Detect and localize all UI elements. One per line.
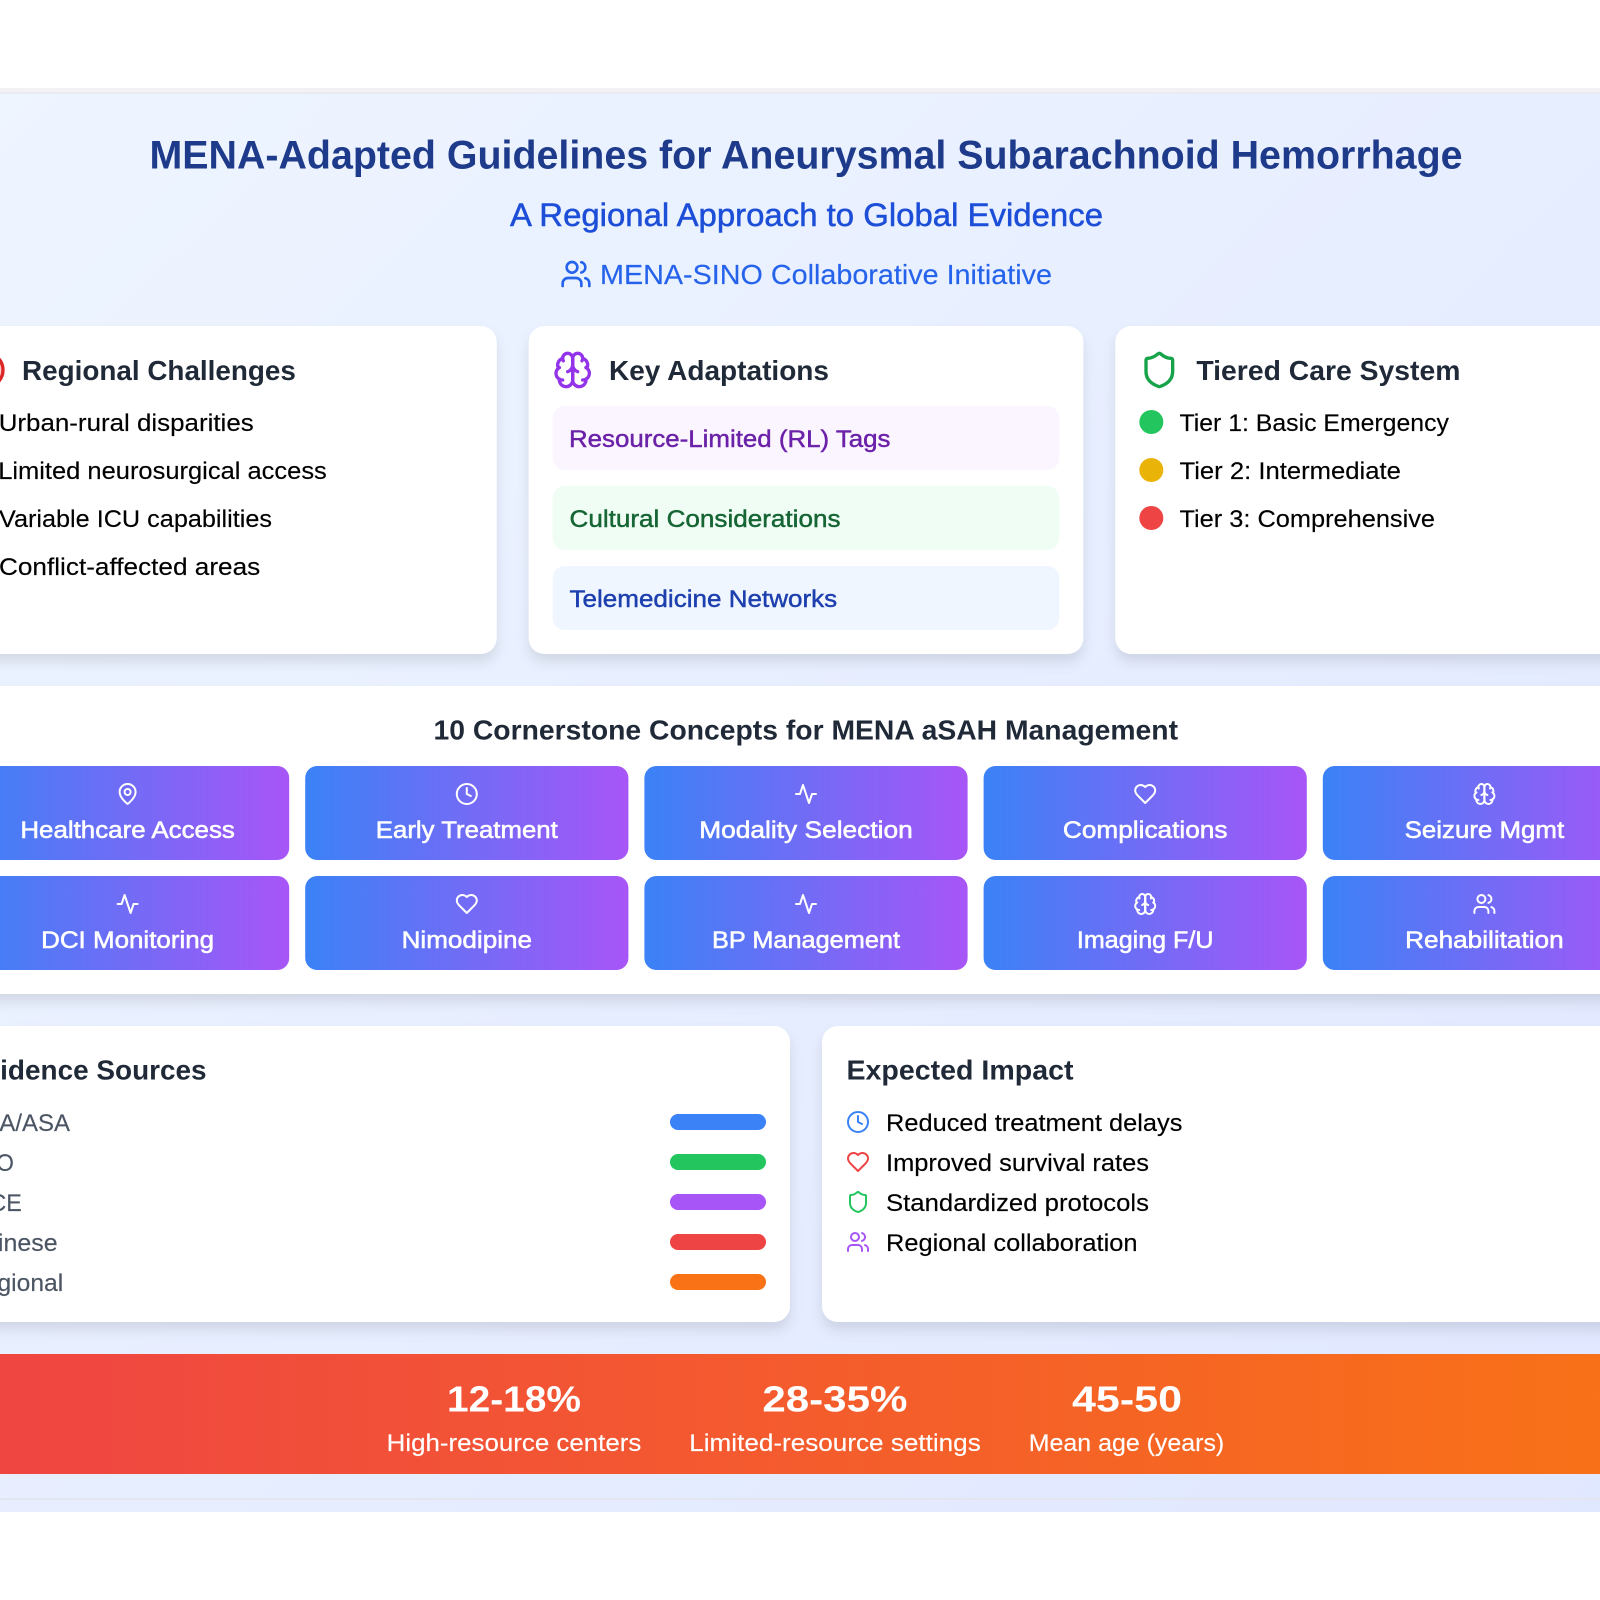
heading: Key Adaptations bbox=[609, 355, 829, 386]
source: ESO bbox=[0, 1150, 766, 1177]
tile: nimodipine bbox=[305, 876, 628, 970]
tile: seizure management bbox=[1323, 766, 1600, 860]
panel: evidence sources bbox=[0, 1026, 790, 1322]
tile: modality selection bbox=[644, 766, 968, 860]
tile: early treatment bbox=[305, 766, 628, 860]
panel: expected impact bbox=[822, 1026, 1600, 1322]
tile: complications: Complications bbox=[1063, 817, 1227, 844]
tile: early treatment: Early Treatment bbox=[376, 817, 558, 844]
adaptation: telemedicine: Telemedicine Networks bbox=[570, 586, 837, 613]
challenge list: Urban-rural disparities bbox=[0, 410, 254, 437]
heading: 10 Cornerstone Concepts for MENA aSAH Management bbox=[434, 715, 1178, 746]
tier 1: Tier 1: Basic Emergency bbox=[1180, 410, 1449, 437]
impact: collaboration: Regional collaboration bbox=[886, 1230, 1138, 1257]
tile: nimodipine: Nimodipine bbox=[402, 927, 532, 954]
heading: Expected Impact bbox=[846, 1054, 1074, 1085]
stat: mean age: Mean age (years) bbox=[1029, 1430, 1224, 1457]
tier 2: Tier 2: Intermediate bbox=[1180, 458, 1401, 485]
stat: high-resource centers bbox=[387, 1378, 641, 1457]
adaptation: RL tags: Resource-Limited (RL) Tags bbox=[569, 426, 890, 453]
tile: imaging follow-up bbox=[984, 876, 1307, 970]
tile: imaging follow-up: Imaging F/U bbox=[1077, 927, 1213, 954]
panel: key adaptations bbox=[529, 326, 1083, 654]
challenge list: Limited neurosurgical access bbox=[0, 458, 327, 485]
statistics band bbox=[0, 1354, 1600, 1474]
source: AHA/ASA bbox=[0, 1110, 766, 1137]
icon: shield bbox=[1146, 353, 1173, 387]
challenge list bbox=[0, 410, 327, 581]
stat: high-resource centers: 12-18% bbox=[447, 1378, 581, 1420]
stat: mean age bbox=[1029, 1378, 1224, 1457]
tier 3: Tier 3: Comprehensive bbox=[1180, 506, 1435, 533]
icon: alert circle bbox=[0, 353, 3, 387]
stat: high-resource centers: High-resource centers bbox=[387, 1430, 641, 1457]
tile: DCI monitoring bbox=[0, 876, 289, 970]
tile: healthcare access: Healthcare Access bbox=[20, 817, 235, 844]
tile: rehabilitation: Rehabilitation bbox=[1405, 927, 1564, 954]
tile: healthcare access bbox=[0, 766, 289, 860]
tile: modality selection: Modality Selection bbox=[699, 817, 913, 844]
heading: Regional Challenges bbox=[22, 355, 296, 386]
stat: mean age: 45-50 bbox=[1072, 1378, 1182, 1420]
adaptation: telemedicine bbox=[553, 566, 1059, 630]
adaptation: RL tags bbox=[553, 406, 1059, 470]
tile: complications bbox=[984, 766, 1307, 860]
stat: limited-resource settings: Limited-resource settings bbox=[689, 1430, 981, 1457]
panel: tiered care system bbox=[1115, 326, 1600, 654]
heading: Tiered Care System bbox=[1196, 355, 1460, 386]
impact: protocols: Standardized protocols bbox=[886, 1190, 1149, 1217]
challenge list: Conflict-affected areas bbox=[0, 554, 260, 581]
source: Regional bbox=[0, 1270, 766, 1297]
icon: users bbox=[563, 262, 589, 286]
header bbox=[150, 134, 1462, 290]
tile: seizure management: Seizure Mgmt bbox=[1405, 817, 1565, 844]
stat: limited-resource settings bbox=[689, 1378, 981, 1457]
subtitle: A Regional Approach to Global Evidence bbox=[510, 197, 1103, 233]
title: MENA-Adapted Guidelines for Aneurysmal Subarachnoid Hemorrhage bbox=[150, 134, 1462, 178]
icon: brain bbox=[556, 353, 589, 387]
panel: cornerstone concepts bbox=[0, 686, 1600, 994]
impact: reduced delays: Reduced treatment delays bbox=[886, 1110, 1182, 1137]
source: NICE bbox=[0, 1190, 766, 1217]
tile: DCI monitoring: DCI Monitoring bbox=[41, 927, 214, 954]
tile: rehabilitation bbox=[1323, 876, 1600, 970]
adaptation: cultural: Cultural Considerations bbox=[570, 506, 840, 533]
panel: regional challenges bbox=[0, 326, 497, 654]
adaptation: cultural bbox=[553, 486, 1059, 550]
impact: survival: Improved survival rates bbox=[886, 1150, 1149, 1177]
tile: BP management: BP Management bbox=[712, 927, 900, 954]
stat: limited-resource settings: 28-35% bbox=[762, 1378, 907, 1420]
source: Chinese bbox=[0, 1230, 766, 1257]
challenge list: Variable ICU capabilities bbox=[0, 506, 272, 533]
initiative label: MENA-SINO Collaborative Initiative bbox=[600, 259, 1052, 290]
tile: BP management bbox=[644, 876, 968, 970]
